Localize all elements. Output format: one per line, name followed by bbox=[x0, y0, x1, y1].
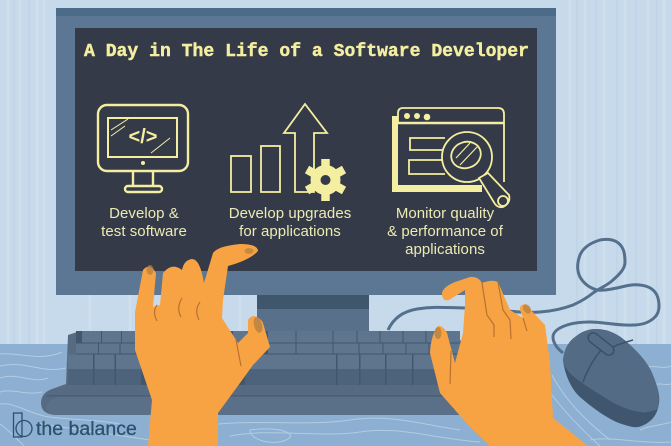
monitor stand bbox=[257, 294, 369, 333]
caption: monitor quality: Monitor quality bbox=[396, 205, 495, 222]
right hand bbox=[430, 277, 588, 446]
background: wall bbox=[0, 0, 671, 346]
caption: monitor quality: applications bbox=[405, 241, 485, 258]
monitor bbox=[56, 8, 556, 295]
icon: growth bars, arrow and gear bbox=[231, 104, 344, 201]
icon: browser window with magnifier bbox=[392, 108, 509, 207]
caption: monitor quality: & performance of bbox=[387, 223, 504, 240]
icon: computer monitor with code bbox=[98, 105, 188, 192]
caption: develop upgrades: Develop upgrades bbox=[229, 205, 351, 222]
cable: mouse cord bbox=[388, 239, 659, 353]
caption: develop and test software: Develop & bbox=[109, 205, 179, 222]
logo: the balance: the balance bbox=[36, 418, 137, 440]
caption: develop and test software: test software bbox=[101, 223, 187, 240]
mouse bbox=[563, 329, 659, 427]
keyboard bbox=[41, 331, 462, 415]
left hand bbox=[135, 244, 270, 446]
title: A Day in The Life of a Software Developer bbox=[84, 42, 529, 62]
logo: the balance bbox=[14, 413, 137, 440]
icon: gear bbox=[307, 159, 344, 201]
icon: computer monitor with code: </> bbox=[129, 126, 157, 148]
caption: develop upgrades: for applications bbox=[239, 223, 341, 240]
background: wooden desk bbox=[0, 344, 671, 446]
